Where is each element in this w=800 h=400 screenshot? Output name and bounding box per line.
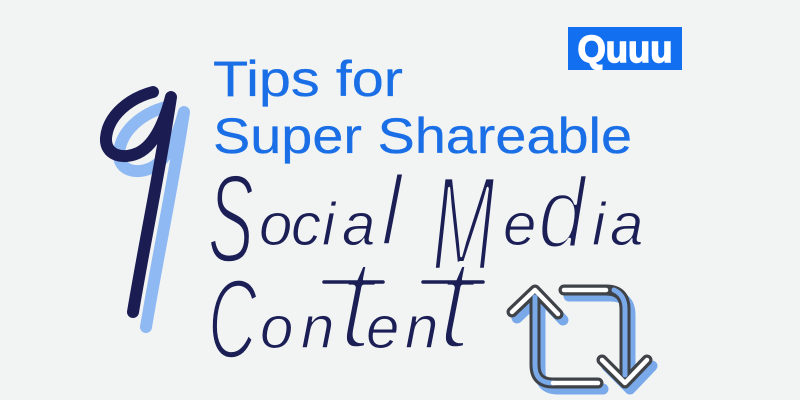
numeral 9 with blue shadow — [106, 92, 184, 327]
script heading: Social Media: S — [208, 150, 254, 289]
script heading: Social Media: a — [610, 191, 643, 258]
logo: Quuu: Quuu — [578, 29, 672, 71]
script heading: Social Media: a — [342, 191, 375, 258]
script heading: Social Media: e — [503, 191, 536, 258]
script heading: Content: t — [437, 230, 478, 376]
script heading: Social Media: i — [322, 191, 337, 258]
script heading: Social Media — [208, 149, 643, 300]
heading: Tips for Super Shareable — [213, 51, 632, 164]
script heading: Social Media: i — [592, 191, 607, 258]
icon: repost arrows — [512, 290, 652, 389]
script heading: Social Media: l — [380, 155, 405, 267]
heading: Tips for Super Shareable: Super Shareable — [213, 108, 632, 164]
script heading: Content: t — [338, 230, 379, 376]
script heading: Content: C — [208, 256, 257, 382]
script heading: Content — [208, 230, 483, 382]
script heading: Social Media: M — [432, 149, 496, 300]
heading: Tips for Super Shareable: Tips for — [213, 51, 403, 107]
script heading: Social Media: oc — [259, 191, 321, 258]
script heading: Content: en — [366, 294, 438, 361]
script heading: Social Media: d — [538, 156, 588, 269]
script heading: Content: on — [260, 294, 334, 361]
